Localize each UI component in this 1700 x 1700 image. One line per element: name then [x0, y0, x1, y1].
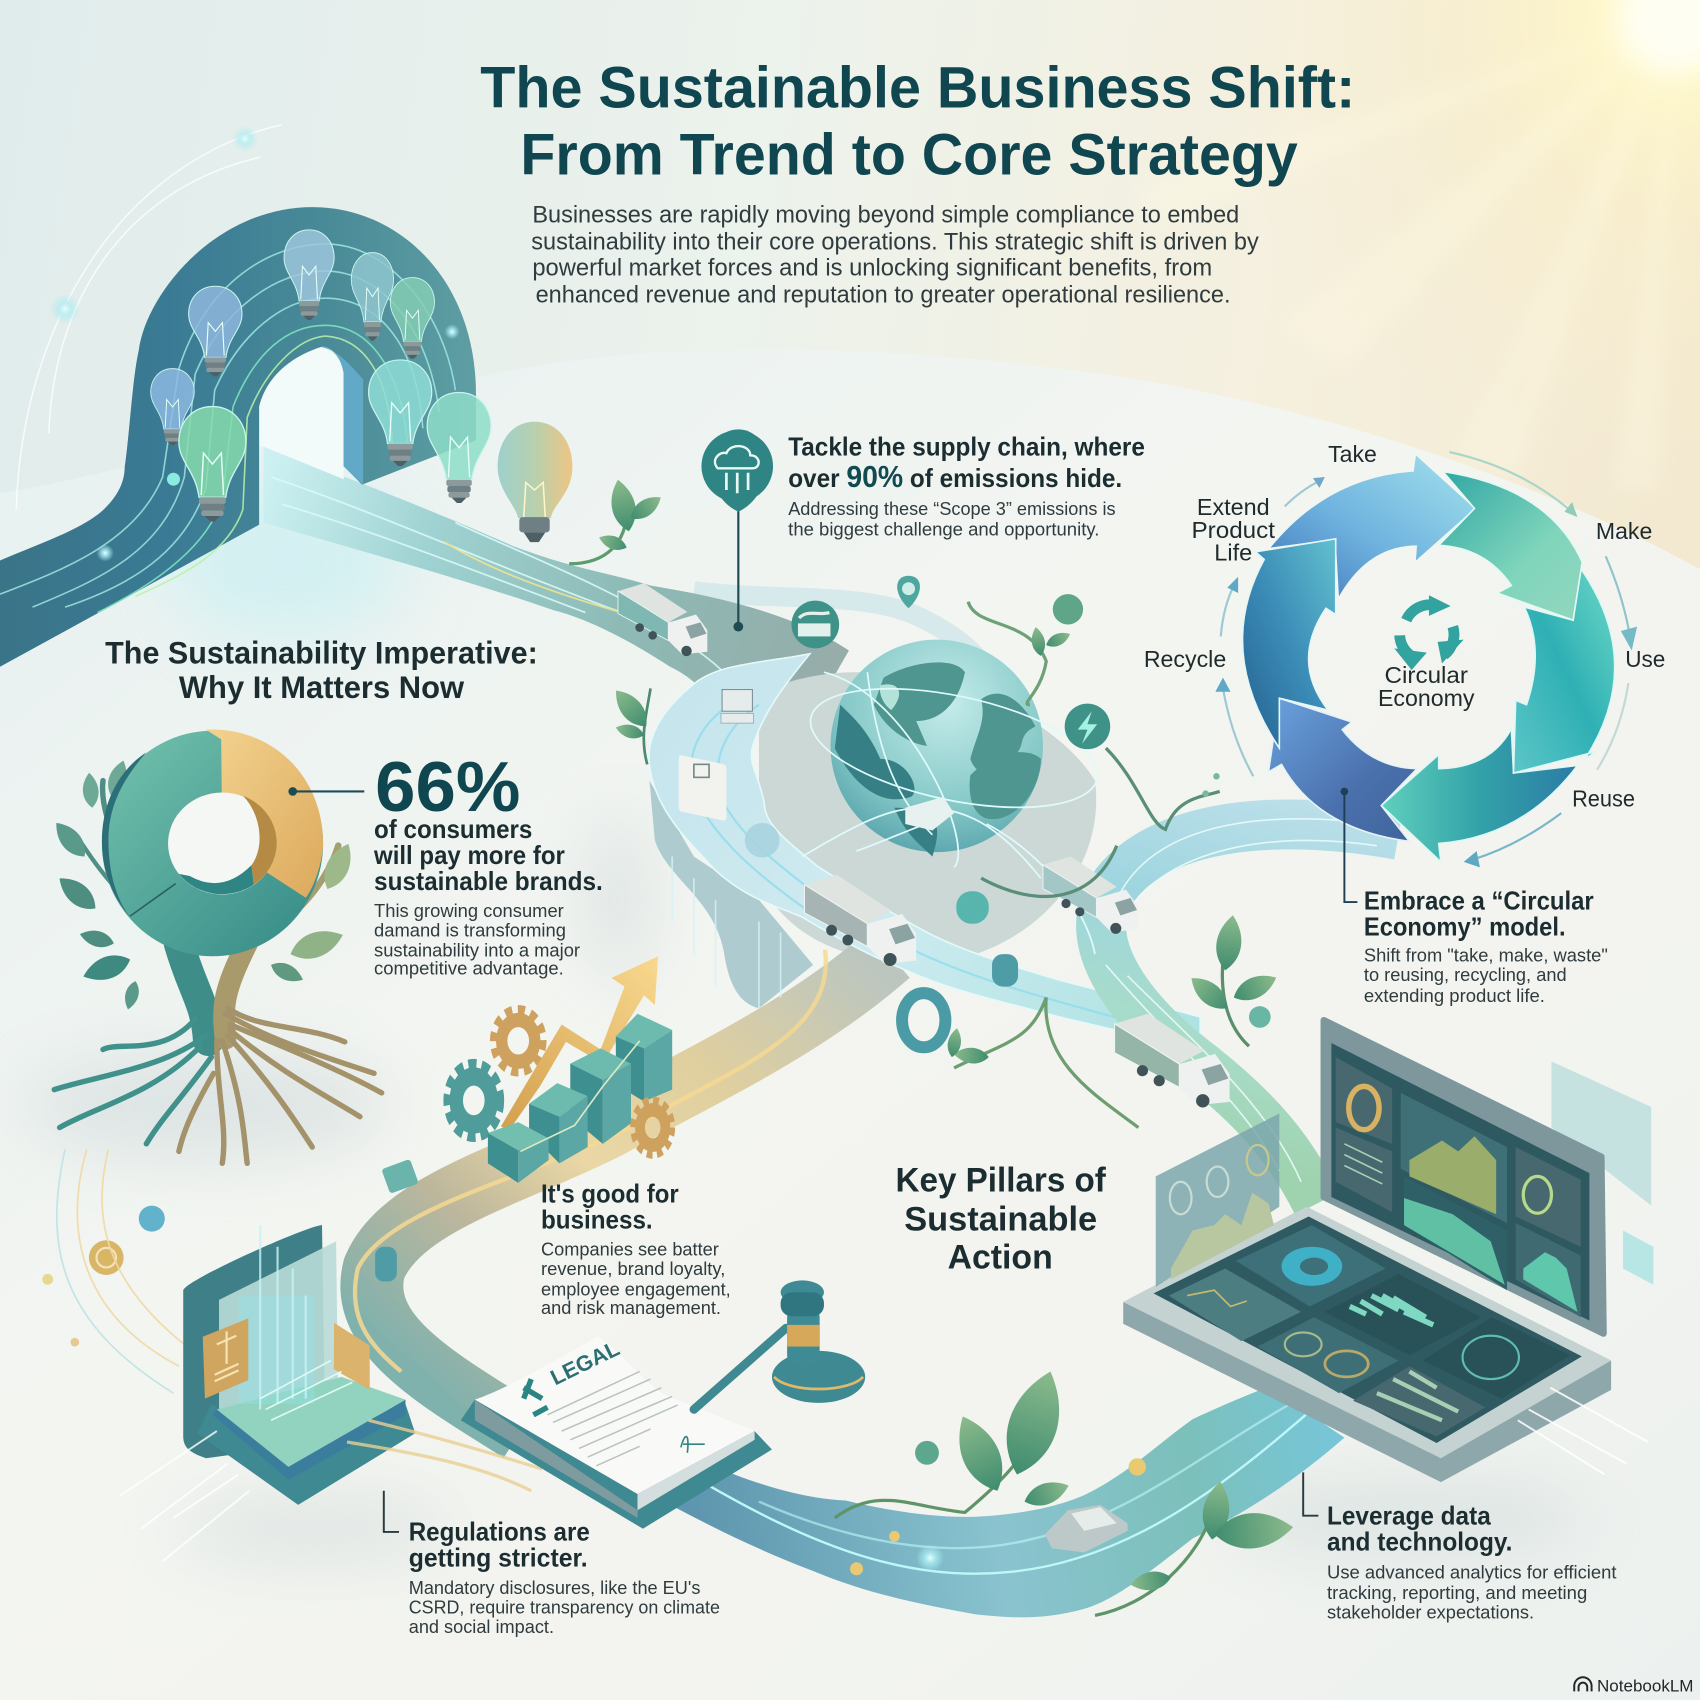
- circular economy text: Shift from "take, make, waste": [1364, 945, 1608, 966]
- glass road: [649, 654, 1200, 1049]
- circular economy text: Embrace a “Circular: [1364, 886, 1594, 916]
- vine with bolt icon: [968, 594, 1220, 896]
- pale upper band to globe: [694, 591, 992, 678]
- floating left dashboard panel: [1156, 1113, 1279, 1287]
- stat description: damand is transforming: [374, 920, 566, 941]
- laptop dashboard: [1123, 1020, 1653, 1482]
- cycle labels: Take: [1328, 441, 1377, 467]
- container truck: [1115, 1014, 1230, 1108]
- gavel: [694, 1280, 865, 1409]
- gear small gold: [633, 1100, 672, 1155]
- data streams left of stack: [119, 1431, 249, 1561]
- small road icons: [902, 891, 1271, 1047]
- hole: [168, 793, 276, 894]
- screen widgets: [1336, 1057, 1581, 1317]
- bar 1: [488, 1122, 549, 1183]
- good for business text: business.: [541, 1204, 653, 1234]
- title: [480, 55, 1355, 188]
- icon: location pin: [897, 576, 920, 608]
- gold stream: [347, 1420, 542, 1491]
- title: From Trend to Core Strategy: [520, 123, 1298, 188]
- teal inner wall: [179, 865, 254, 894]
- data technology text: [1327, 1500, 1617, 1623]
- laptop base: [1123, 1207, 1611, 1482]
- regulations text: getting stricter.: [409, 1543, 588, 1573]
- icon: cloud pin with line: [701, 429, 773, 632]
- supply chain callout: [788, 431, 1145, 540]
- arrow: make: [1439, 472, 1586, 620]
- good for business text: employee engagement,: [541, 1279, 731, 1300]
- soft shadows on ground: [22, 813, 1594, 1561]
- circular economy text: extending product life.: [1364, 985, 1545, 1006]
- stat description: sustainable brands.: [374, 866, 603, 896]
- bar 2: [529, 1083, 588, 1163]
- gold arrow zigzag: [501, 956, 658, 1130]
- regulations text: CSRD, require transparency on climate: [409, 1596, 720, 1617]
- wall circuit lines: [672, 857, 781, 1008]
- bar 3: [570, 1048, 631, 1144]
- heading: key pillars: Sustainable: [904, 1201, 1097, 1239]
- data lines right of laptop: [1518, 1388, 1648, 1474]
- vine and leaves centre: [946, 914, 1281, 1128]
- cycle labels: Extend: [1197, 494, 1270, 520]
- decorative orbit arcs left: [57, 1149, 184, 1393]
- circular economy connector: [1341, 788, 1357, 902]
- door opening: [259, 347, 344, 479]
- cycle labels: Recycle: [1144, 646, 1226, 672]
- bottom road highlights: [705, 1404, 1312, 1575]
- heading: sustainability imperative: The Sustainability Imperative:: [105, 636, 538, 671]
- sunburst: [976, 0, 1700, 607]
- stat description: [373, 814, 603, 979]
- good for business text: Companies see batter: [541, 1238, 719, 1259]
- stat description: will pay more for: [373, 840, 565, 870]
- heading: key pillars: Action: [948, 1238, 1053, 1276]
- intro paragraph: enhanced revenue and reputation to greater operational resilience.: [536, 281, 1231, 308]
- donut chart 66%: [102, 730, 323, 956]
- road highlights: [271, 477, 759, 716]
- sensor dome: [745, 823, 780, 858]
- arch with circuit lines: [0, 207, 476, 667]
- bottom right sprout: [1095, 1480, 1295, 1615]
- regulations connector: [384, 1491, 399, 1532]
- right curved road: [1101, 824, 1399, 1203]
- gear gold large: [494, 1010, 543, 1072]
- glow column: [239, 1296, 314, 1404]
- keyboard screen: [1154, 1216, 1582, 1443]
- heading: sustainability imperative: Why It Matters Now: [179, 670, 465, 705]
- trunk: [179, 943, 208, 1041]
- platform under globe: [759, 672, 1096, 962]
- cycle labels: Product: [1192, 517, 1276, 543]
- gold road icons: [42, 1159, 419, 1347]
- small cycle arrows: [1215, 452, 1637, 867]
- gold inner wall: [243, 796, 277, 885]
- stat description: of consumers: [374, 814, 532, 844]
- teal roots: [54, 1019, 211, 1144]
- gavel mark: [524, 1379, 548, 1415]
- data technology text: Use advanced analytics for efficient: [1327, 1562, 1617, 1583]
- data technology text: stakeholder expectations.: [1327, 1602, 1534, 1623]
- road: from arch to supply chain: [263, 447, 849, 721]
- intro paragraph: powerful market forces and is unlocking significant benefits, from: [532, 254, 1212, 281]
- good for business text: and risk management.: [541, 1297, 721, 1318]
- icon: recycle: [1394, 595, 1464, 670]
- donut connector: [288, 787, 364, 796]
- good for business text: [541, 1178, 731, 1318]
- cycle labels: Life: [1214, 540, 1252, 566]
- intro paragraph: Businesses are rapidly moving beyond simple compliance to embed: [532, 201, 1239, 228]
- circular economy text: to reusing, recycling, and: [1364, 964, 1567, 985]
- car on bottom road: [1045, 1505, 1128, 1553]
- white cargo module on globe: [905, 797, 954, 830]
- main delivery truck: [804, 875, 916, 966]
- monitor vehicle on glass road: [721, 690, 754, 723]
- arrow: extend: [1243, 539, 1336, 748]
- data technology text: Leverage data: [1327, 1500, 1491, 1530]
- ground floor: [0, 349, 1700, 1700]
- gear teal: [447, 1064, 501, 1137]
- white module on glass road: [679, 755, 726, 821]
- icon: container pin: [791, 601, 839, 648]
- regulations text: [409, 1517, 720, 1637]
- gold card: [334, 1323, 370, 1390]
- right road highlights: [1106, 819, 1377, 1182]
- intro paragraph: [531, 201, 1259, 308]
- branches: [103, 781, 184, 949]
- bottom sprout with leaves: [835, 1364, 1073, 1518]
- intro paragraph: sustainability into their core operations. This strategic shift is driven by: [531, 228, 1259, 255]
- stat description: This growing consumer: [374, 900, 564, 921]
- supply chain callout: the biggest challenge and opportunity.: [788, 519, 1099, 540]
- circular economy text: [1364, 886, 1608, 1006]
- gears and growth bars: [447, 956, 672, 1183]
- arrow: recycle: [1268, 698, 1417, 841]
- gold light streak: [355, 950, 826, 1371]
- arrow: reuse: [1381, 729, 1577, 862]
- floating right panel: [1551, 1061, 1651, 1206]
- stat description: competitive advantage.: [374, 958, 564, 979]
- heading: key pillars: [896, 1162, 1106, 1276]
- elevated wall: [649, 781, 813, 1008]
- bottom road: [672, 1387, 1344, 1617]
- tan roots: [179, 1008, 382, 1163]
- truck on upper road: [618, 583, 707, 656]
- regulations text: Mandatory disclosures, like the EU's: [409, 1577, 700, 1598]
- laptop screen: [1324, 1020, 1604, 1334]
- title: The Sustainable Business Shift:: [480, 55, 1355, 120]
- cyan glow under arch: [168, 488, 407, 640]
- cycle labels: Reuse: [1572, 786, 1635, 812]
- cycle labels: Use: [1625, 646, 1665, 672]
- regulations text: and social impact.: [409, 1616, 554, 1637]
- cycle labels: Economy: [1378, 685, 1475, 711]
- tree with roots: [49, 758, 382, 1163]
- cycle labels: Circular: [1385, 662, 1468, 688]
- arrow: take to make: [1271, 455, 1474, 596]
- data connector: [1303, 1472, 1318, 1516]
- cycle labels: [1144, 441, 1665, 812]
- bar 4: [616, 1014, 672, 1102]
- heading: key pillars: Key Pillars of: [896, 1162, 1106, 1200]
- continents: [835, 662, 1041, 857]
- LEGAL heading: LEGAL: [546, 1335, 623, 1390]
- sprout left of glass road: [608, 684, 654, 764]
- supply chain callout: Tackle the supply chain, where: [788, 431, 1145, 461]
- stat: 66 percent: 66%: [375, 747, 520, 826]
- glass road streaks: [691, 694, 1182, 1035]
- base widgets: [1169, 1225, 1570, 1437]
- orbit lines: [800, 667, 1108, 954]
- stat description: sustainability into a major: [374, 939, 580, 960]
- heading: sustainability imperative: [105, 636, 538, 705]
- circular economy diagram: [1144, 441, 1665, 867]
- good for business text: It's good for: [541, 1178, 679, 1208]
- light bulbs: [151, 230, 491, 522]
- legal book: [461, 1335, 772, 1529]
- data technology text: tracking, reporting, and meeting: [1327, 1582, 1587, 1603]
- NotebookLM watermark: NotebookLM: [1597, 1676, 1693, 1695]
- globe with continents: [800, 640, 1108, 954]
- document lines: [548, 1371, 678, 1466]
- second delivery truck: [1043, 857, 1138, 934]
- data technology text: and technology.: [1327, 1526, 1512, 1556]
- decorative light arcs: [16, 125, 282, 510]
- compliance tablet stack: [183, 1225, 415, 1505]
- gold card scales: [203, 1318, 248, 1399]
- signature: [681, 1437, 705, 1453]
- good for business text: revenue, brand loyalty,: [541, 1258, 725, 1279]
- gold road: [372, 954, 889, 1431]
- arrow: use: [1514, 564, 1615, 773]
- circuit lines: [0, 244, 455, 613]
- gold light bulb: [498, 422, 572, 542]
- cycle labels: Make: [1596, 518, 1652, 544]
- supply chain callout: over 90% of emissions hide.: [788, 461, 1122, 494]
- sprout near road: [569, 477, 665, 564]
- regulations text: Regulations are: [409, 1517, 590, 1547]
- gold slice: [206, 730, 323, 898]
- circular economy text: Economy” model.: [1364, 912, 1566, 942]
- supply chain callout: Addressing these “Scope 3” emissions is: [788, 498, 1116, 519]
- floating status tile: [1623, 1231, 1653, 1285]
- door opening reveal: [321, 347, 363, 485]
- tree leaves: [49, 758, 358, 1011]
